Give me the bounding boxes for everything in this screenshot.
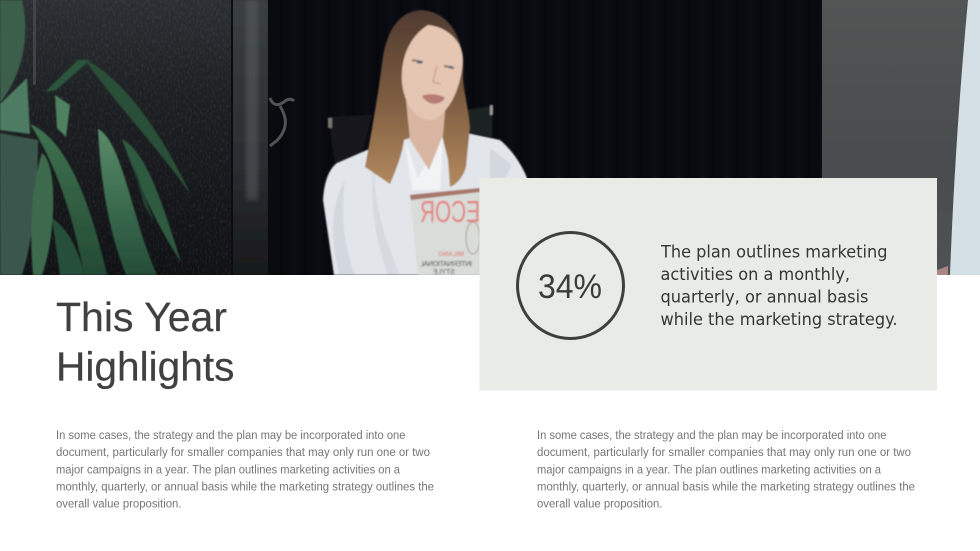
office chair <box>328 105 493 168</box>
body text: right column: overall value proposition. <box>537 496 662 510</box>
body text: left column <box>56 428 434 510</box>
body text: left column: major campaigns in a year. The plan outlines marketing activities on a <box>56 462 400 476</box>
title <box>56 294 234 390</box>
body text: left column: document, particularly for smaller companies that may only run one or two <box>56 445 430 459</box>
woman <box>323 10 527 275</box>
body text: right column: In some cases, the strategy and the plan may be incorporated into one <box>537 428 887 442</box>
panel: stat callout <box>480 178 937 390</box>
hair <box>365 10 470 187</box>
magazine <box>410 188 480 276</box>
stat ring with percentage: 34% <box>538 268 602 306</box>
magazine: STYLE <box>432 269 455 276</box>
stat description: The plan outlines marketing <box>660 242 888 262</box>
grey wall <box>822 0 980 275</box>
stat description: quarterly, or annual basis <box>660 288 869 308</box>
stat description <box>660 242 898 330</box>
body text: left column: In some cases, the strategy and the plan may be incorporated into one <box>56 428 406 442</box>
background photo: woman with magazine <box>0 0 980 276</box>
title: Highlights <box>56 344 234 390</box>
body text: right column: major campaigns in a year. The plan outlines marketing activities on a <box>537 462 881 476</box>
face <box>402 25 463 120</box>
body text: left column: monthly, quarterly, or annual basis while the marketing strategy outlines the <box>56 480 434 494</box>
stat description: activities on a monthly, <box>660 265 850 285</box>
neck <box>406 100 446 170</box>
curtain backdrop <box>262 0 824 275</box>
white shirt <box>323 133 527 275</box>
magazine: INTERNATIONAL <box>420 261 472 268</box>
stat ring with percentage <box>518 232 624 338</box>
dark door <box>0 0 294 275</box>
body text: left column: overall value proposition. <box>56 496 182 510</box>
body text: right column <box>537 428 915 510</box>
magazine: MILANO <box>438 251 464 258</box>
title: This Year <box>56 294 227 340</box>
magazine: ECOR <box>420 194 480 229</box>
stat description: while the marketing strategy. <box>660 310 898 330</box>
body text: right column: monthly, quarterly, or annual basis while the marketing strategy outlines the <box>537 480 915 494</box>
body text: right column: document, particularly for smaller companies that may only run one or two <box>537 445 911 459</box>
plant <box>0 0 191 275</box>
